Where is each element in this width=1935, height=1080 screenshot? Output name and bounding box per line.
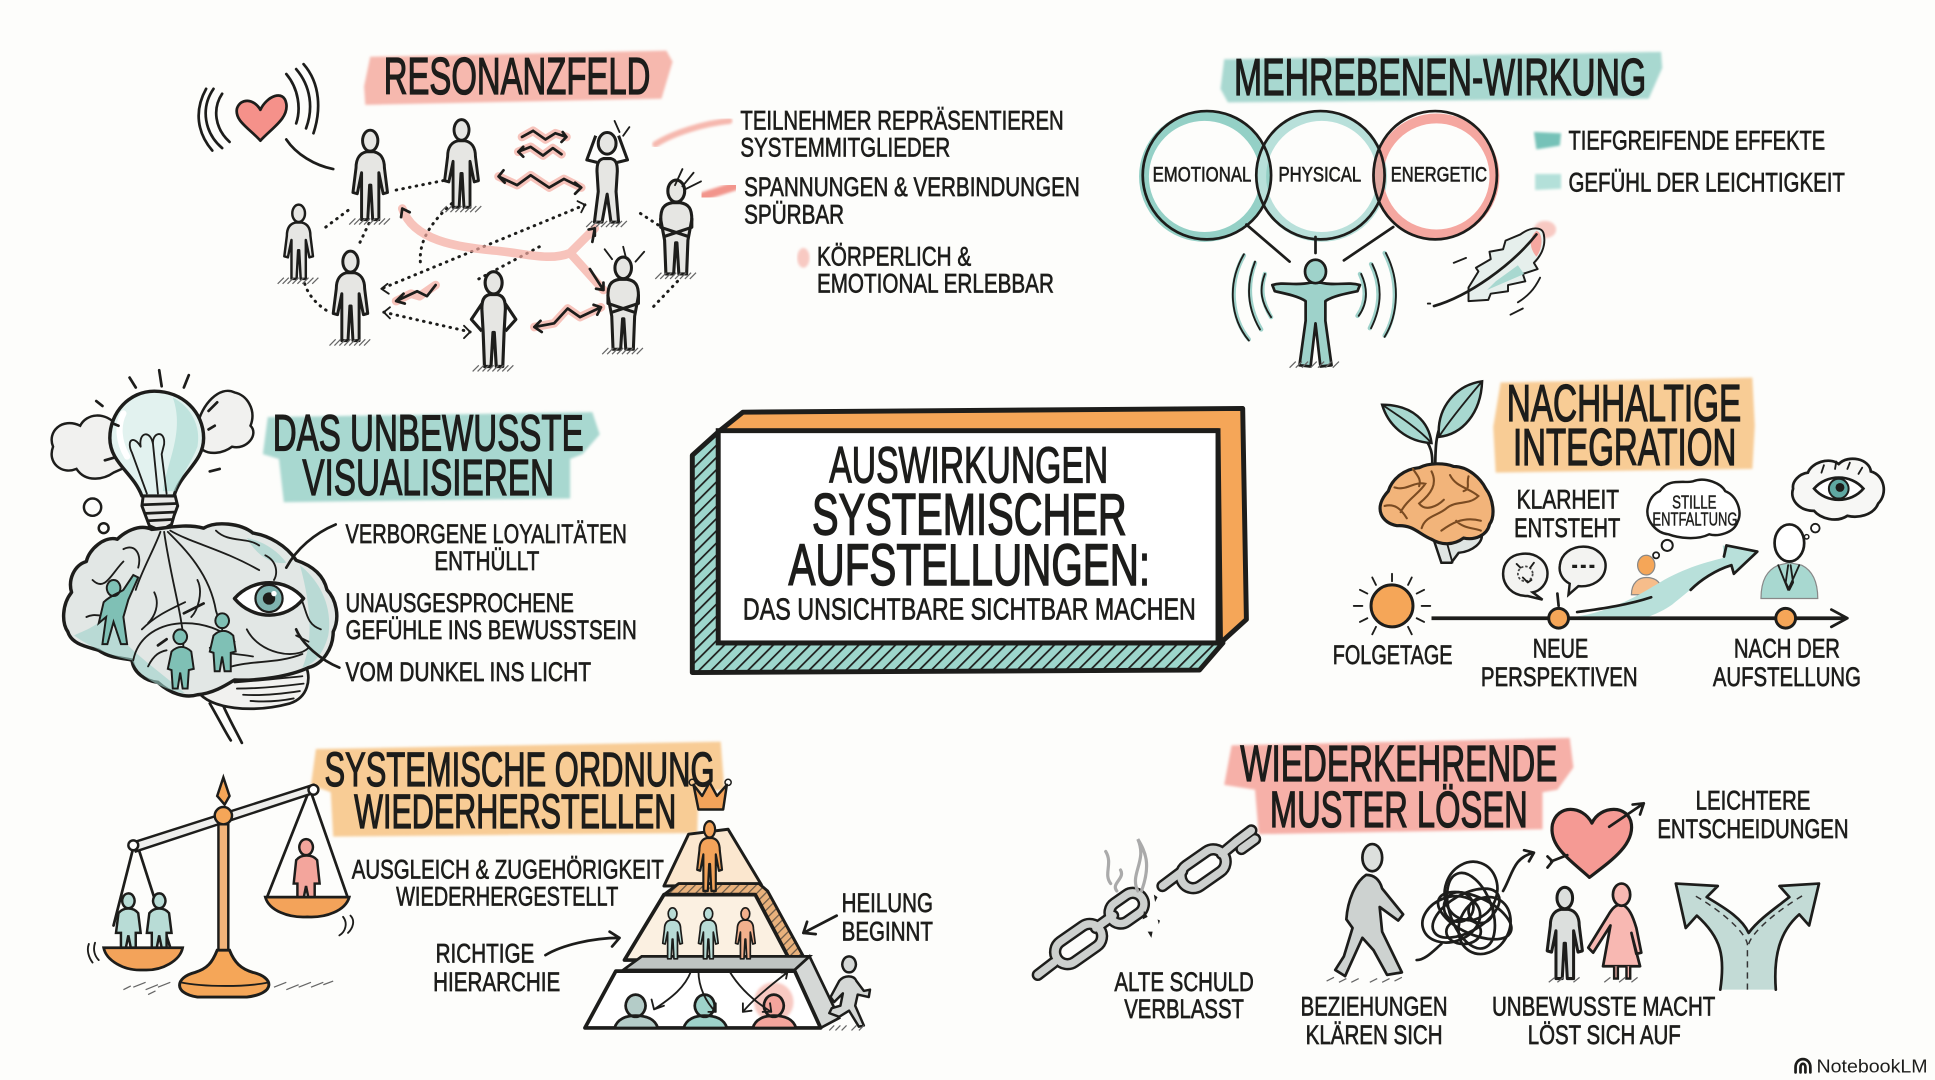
- text block: klarheit entsteht: [1514, 483, 1620, 543]
- heading: resonanzfeld: RESONANZFELD: [384, 47, 650, 105]
- heading highlight: mehrebenen: [1220, 52, 1662, 102]
- arrow: richtige hierarchie: [545, 932, 619, 955]
- arrow: heilung: [803, 916, 837, 934]
- text block: koerperlich: KÖRPERLICH &: [817, 240, 971, 271]
- text block: richtige hierarchie: RICHTIGE: [436, 938, 534, 969]
- heading highlight: unbewusste: [263, 412, 600, 502]
- panel: mehrebenen-wirkung: [1143, 48, 1845, 368]
- icon: light bulb: [96, 370, 220, 531]
- panel: nachhaltige integration: [1333, 374, 1884, 692]
- legend: gefuehl der leichtigkeit: [1535, 166, 1845, 197]
- label: neue perspektiven: PERSPEKTIVEN: [1481, 661, 1638, 692]
- text block: verborgene loyalitaeten: ENTHÜLLT: [434, 545, 539, 576]
- cloud: stille entfaltung: STILLE: [1672, 491, 1717, 512]
- text block: heilung beginnt: [842, 887, 933, 946]
- text block: verborgene loyalitaeten: VERBORGENE LOYALITÄTEN: [346, 518, 627, 549]
- cloud: stille entfaltung: ENTFALTUNG: [1652, 509, 1738, 530]
- text block: leichtere entscheidungen: LEICHTERE: [1696, 785, 1810, 816]
- cloud: stille entfaltung: [1647, 480, 1739, 558]
- icon: forked road arrow: [1676, 884, 1819, 990]
- title: subtitle: DAS UNSICHTBARE SICHTBAR MACHEN: [743, 591, 1196, 626]
- icon: heart with arrow: [1548, 803, 1644, 877]
- title: main title: [789, 436, 1150, 598]
- icon: person with radiating waves: [1233, 253, 1396, 368]
- speech bubbles: [1503, 547, 1606, 606]
- text block: ausgleich: [352, 854, 664, 912]
- icon: brain with eye and figures: [64, 524, 339, 743]
- icon: sun: [1354, 574, 1430, 634]
- text block: heilung beginnt: HEILUNG: [842, 887, 933, 918]
- text block: unausgesprochene gefuehle: GEFÜHLE INS BEWUSSTSEIN: [346, 614, 637, 645]
- legend: tiefgreifende effekte: [1534, 124, 1825, 155]
- text block: spannungen: SPÜRBAR: [744, 198, 844, 229]
- text block: beziehungen: [1301, 991, 1448, 1050]
- box: orange top and right faces: [718, 408, 1246, 643]
- venn: three circles: [1143, 111, 1497, 239]
- legend: gefuehl der leichtigkeit: GEFÜHL DER LEICHTIGKEIT: [1568, 166, 1845, 197]
- label: neue perspektiven: [1481, 633, 1638, 692]
- heading: unbewusste: DAS UNBEWUSSTE: [273, 404, 584, 461]
- text block: richtige hierarchie: [433, 938, 560, 997]
- panel: wiederkehrende muster loesen: [1038, 735, 1849, 1050]
- title: main title: AUFSTELLUNGEN:: [789, 534, 1150, 598]
- box: white front face: [718, 431, 1218, 643]
- icon: small orange person: [1631, 555, 1662, 595]
- text block: koerperlich: EMOTIONAL ERLEBBAR: [817, 267, 1054, 298]
- text block: klarheit entsteht: ENTSTEHT: [1514, 512, 1620, 543]
- heading highlight: wiederkehrende: [1224, 738, 1573, 834]
- title: main title: AUSWIRKUNGEN: [829, 436, 1108, 493]
- icon: feather: [1428, 221, 1556, 315]
- icon: sprouting brain: [1380, 381, 1493, 563]
- title: main title: SYSTEMISCHER: [812, 483, 1127, 547]
- legend: tiefgreifende effekte: TIEFGREIFENDE EFFEKTE: [1568, 124, 1825, 155]
- heading: nachhaltige: NACHHALTIGE: [1507, 374, 1741, 432]
- icon: thought cloud with eye: [1792, 459, 1884, 539]
- text block: unbewusste macht: UNBEWUSSTE MACHT: [1492, 991, 1715, 1022]
- tension arrows: pink field: [396, 131, 603, 332]
- venn: three circles: PHYSICAL: [1278, 163, 1361, 186]
- text block: unbewusste macht: [1492, 991, 1715, 1050]
- heading highlight: systemische ordnung: [311, 742, 724, 837]
- text block: unausgesprochene gefuehle: [346, 587, 637, 645]
- text block: heilung beginnt: BEGINNT: [842, 915, 933, 946]
- text block: teilnehmer: SYSTEMMITGLIEDER: [740, 132, 950, 163]
- label: folgetage: FOLGETAGE: [1333, 639, 1452, 670]
- label: nach der aufstellung: [1713, 633, 1861, 692]
- icon: hierarchy pyramid: [585, 779, 870, 1030]
- text block: ausgleich: AUSGLEICH & ZUGEHÖRIGKEIT: [352, 854, 664, 885]
- text block: alte schuld: ALTE SCHULD: [1114, 966, 1254, 997]
- text block: beziehungen: KLÄREN SICH: [1306, 1019, 1443, 1050]
- text block: beziehungen: BEZIEHUNGEN: [1301, 991, 1448, 1022]
- connector lines: [1246, 225, 1393, 262]
- label: neue perspektiven: NEUE: [1533, 633, 1588, 664]
- panel: das unbewusste visualisieren: [52, 370, 637, 743]
- text block: ausgleich: WIEDERHERGESTELLT: [396, 881, 618, 912]
- icon: upward teal arrow: [1562, 545, 1757, 619]
- label: nach der aufstellung: AUFSTELLUNG: [1713, 661, 1861, 692]
- panel: resonanzfeld: [199, 47, 1080, 371]
- heading: mehrebenen: MEHREBENEN-WIRKUNG: [1234, 48, 1646, 106]
- panel: systemische ordnung: [88, 742, 933, 1030]
- venn: three circles: EMOTIONAL: [1153, 163, 1251, 186]
- text block: alte schuld: [1114, 966, 1254, 1024]
- timeline: [1432, 608, 1847, 628]
- text block: teilnehmer: TEILNEHMER REPRÄSENTIEREN: [740, 105, 1064, 136]
- icon: tangled scribble with arrow: [1416, 850, 1534, 963]
- icon: balance scale: [88, 777, 353, 997]
- icon: thought clouds: [52, 391, 253, 533]
- heading highlight: resonanzfeld: [364, 51, 673, 105]
- text block: vom dunkel ins licht: VOM DUNKEL INS LICHT: [346, 656, 591, 687]
- connections: dotted lines between participants: [305, 180, 677, 338]
- heading: wiederkehrende: WIEDERKEHRENDE: [1240, 735, 1557, 792]
- text block: teilnehmer: [655, 105, 1064, 163]
- text block: koerperlich: [797, 240, 1054, 298]
- central title box: [692, 408, 1246, 673]
- heading highlight: nachhaltige: [1493, 378, 1755, 473]
- heading: integration: INTEGRATION: [1513, 418, 1736, 476]
- venn: three circles: ENERGETIC: [1391, 163, 1487, 186]
- text block: leichtere entscheidungen: [1657, 785, 1849, 844]
- icon: vibrating heart: [199, 64, 333, 169]
- icon: walking person: [1327, 844, 1403, 982]
- heading: systemische ordnung: SYSTEMISCHE ORDNUNG: [325, 743, 715, 797]
- watermark: notebooklm: NotebookLM: [1817, 1055, 1928, 1076]
- heading: muster loesen: MUSTER LÖSEN: [1270, 781, 1528, 838]
- text block: alte schuld: VERBLASST: [1124, 993, 1244, 1024]
- icon: couple holding hands: [1547, 884, 1641, 982]
- heading: visualisieren: VISUALISIEREN: [302, 449, 554, 506]
- text block: spannungen: SPANNUNGEN & VERBINDUNGEN: [744, 171, 1080, 202]
- box: hatched left and bottom faces: [692, 432, 1223, 673]
- figures: eight participants: [278, 120, 701, 371]
- icon: business person: [1761, 524, 1818, 598]
- text block: richtige hierarchie: HIERARCHIE: [433, 966, 560, 997]
- text block: spannungen: [703, 171, 1080, 229]
- icon: broken chain: [1038, 830, 1255, 975]
- text block: unbewusste macht: LÖST SICH AUF: [1528, 1019, 1681, 1050]
- text block: verborgene loyalitaeten: [346, 518, 627, 576]
- label: nach der aufstellung: NACH DER: [1734, 633, 1840, 664]
- text block: unausgesprochene gefuehle: UNAUSGESPROCHENE: [346, 587, 574, 618]
- text block: klarheit entsteht: KLARHEIT: [1517, 483, 1619, 514]
- text block: leichtere entscheidungen: ENTSCHEIDUNGEN: [1657, 813, 1849, 844]
- heading: wiederherstellen: WIEDERHERSTELLEN: [354, 785, 676, 839]
